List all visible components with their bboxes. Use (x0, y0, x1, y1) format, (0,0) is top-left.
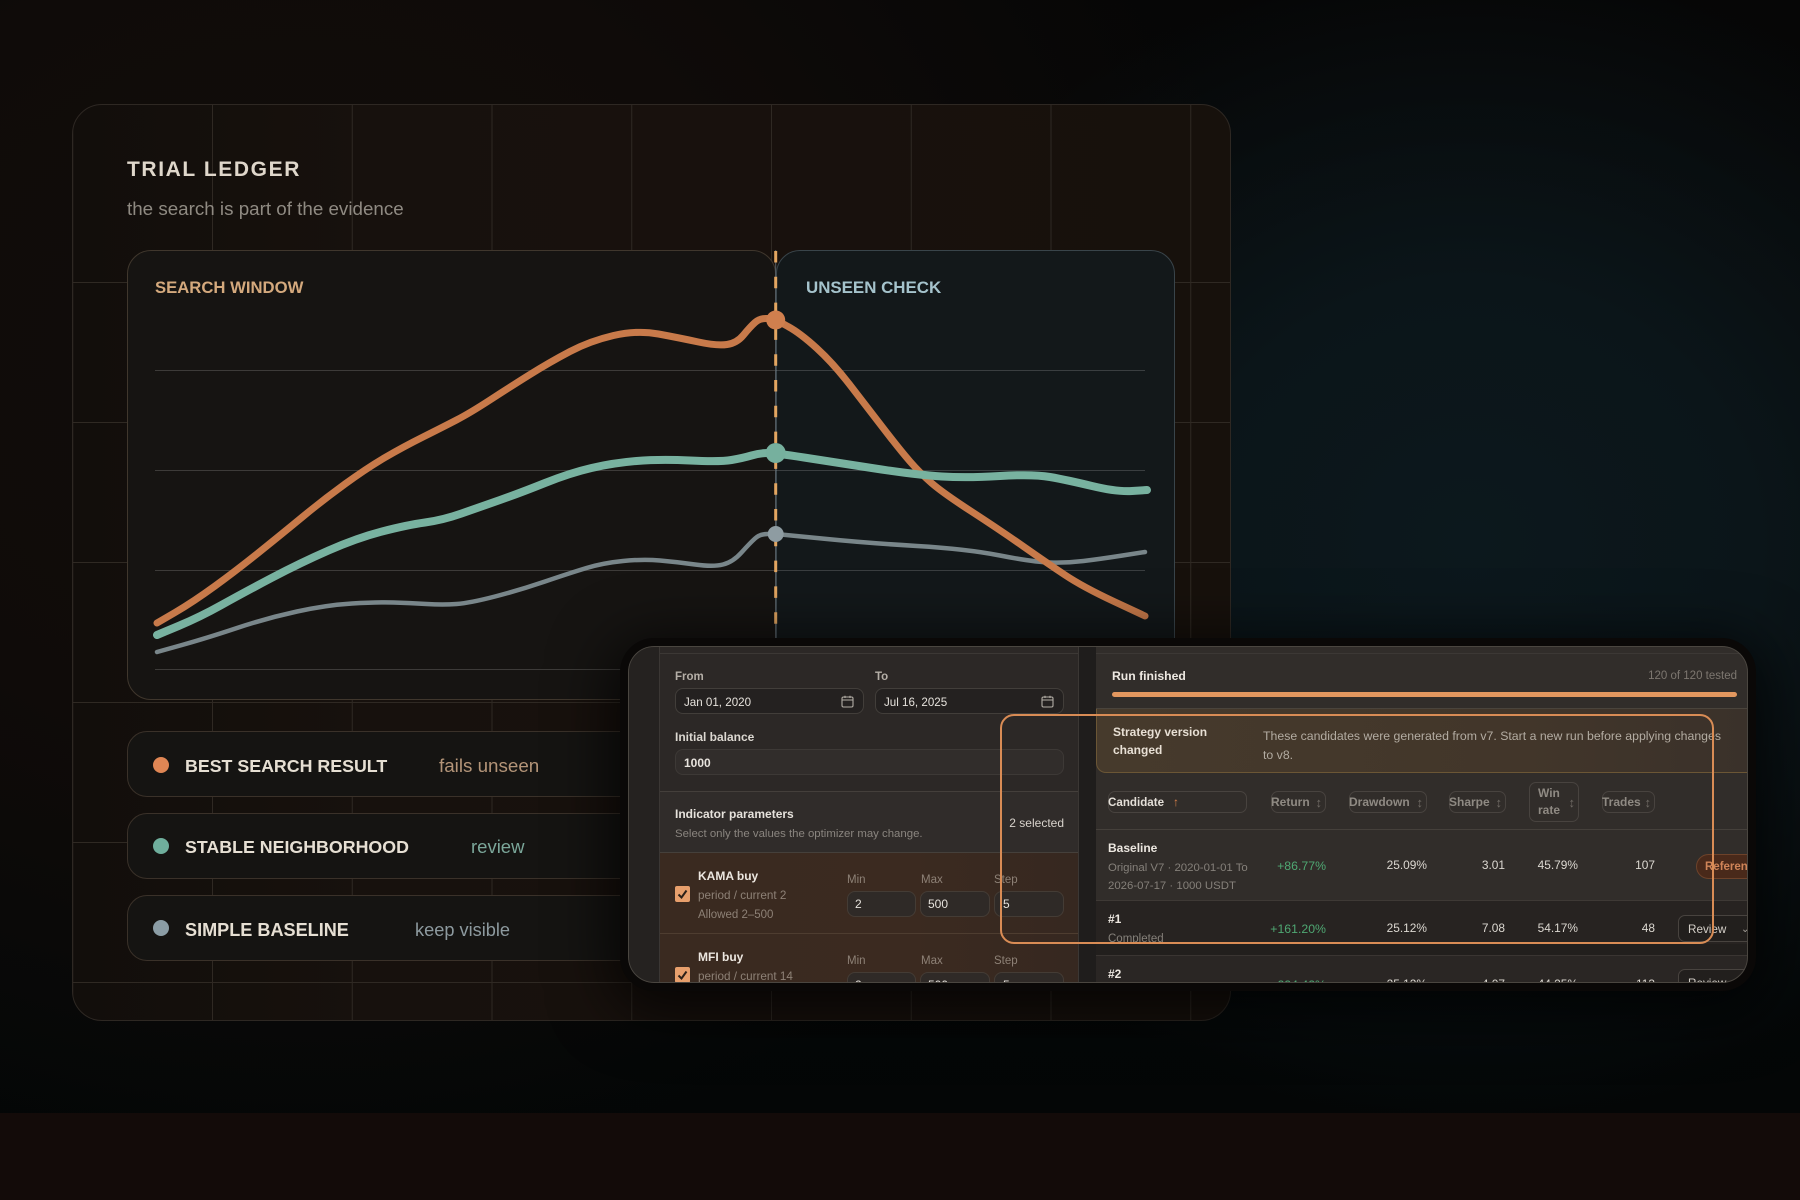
alert body (1263, 728, 1721, 762)
input (675, 749, 1064, 775)
legend: simple baseline (127, 895, 1174, 961)
table header (1096, 773, 1748, 830)
dot (153, 920, 169, 936)
label: From (675, 671, 704, 683)
marker: best search (766, 310, 785, 330)
button: review (1678, 969, 1778, 996)
section: indicator parameters (660, 792, 1078, 853)
series: simple baseline (157, 534, 1145, 652)
field: initial balance (675, 730, 1064, 775)
step label: Step (994, 955, 1018, 967)
return: +86.77% (1277, 859, 1326, 873)
row: baseline (1096, 830, 1748, 901)
column: trades: ↕ (1644, 795, 1651, 810)
label: To (875, 671, 888, 683)
status: keep visible (415, 920, 510, 940)
dot (153, 757, 169, 773)
alert body: These candidates were generated from v7. Start a new run before applying changes (1263, 728, 1721, 742)
legend: stable neighborhood (127, 813, 1174, 879)
panel: settings column (659, 646, 1079, 983)
marker: baseline (768, 526, 784, 542)
max input (920, 972, 990, 998)
step input (994, 891, 1064, 917)
dot (153, 838, 169, 854)
sharpe: 3.01 (1482, 858, 1505, 872)
current: period / current 2 (698, 889, 786, 902)
description: Original V7 · 2020-01-01 To (1108, 862, 1248, 874)
description: 2026-07-17 · 1000 USDT (1108, 880, 1236, 892)
panel: search window (127, 250, 776, 700)
panel: unseen check (776, 250, 1175, 700)
name: #1 (1108, 912, 1121, 926)
alert: strategy version changed (1096, 709, 1748, 773)
status: Completed (1108, 933, 1164, 945)
checkbox (675, 886, 690, 902)
row: MFI buy (660, 934, 1078, 983)
min input (847, 972, 916, 998)
column: sharpe (1449, 791, 1506, 813)
trades: 107 (1635, 858, 1655, 872)
name: Baseline (1108, 841, 1157, 855)
line chart (153, 250, 1151, 670)
step label: Step (994, 874, 1018, 886)
value: 1000 (684, 756, 711, 770)
min label: Min (847, 955, 866, 967)
column: return (1271, 791, 1326, 813)
label: BEST SEARCH RESULT (185, 756, 387, 776)
max input (920, 891, 990, 917)
column: candidate (1108, 791, 1247, 813)
column: win rate (1529, 782, 1579, 822)
panel: optimizer window screenshot (628, 646, 1748, 983)
clipped strip (1096, 944, 1748, 956)
field: from (675, 671, 864, 714)
row: candidate 1 (1096, 901, 1748, 956)
drawdown: 25.09% (1387, 858, 1427, 872)
button: review (1678, 915, 1778, 942)
bottom band (0, 1113, 1800, 1200)
min label: Min (847, 874, 866, 886)
column: return: Return (1271, 795, 1310, 809)
panel: trial ledger card (72, 104, 1231, 1021)
checkbox (675, 967, 690, 983)
marker: stable (766, 443, 786, 463)
field: to (875, 671, 1064, 714)
step input (994, 972, 1064, 998)
column: sharpe: ↕ (1496, 795, 1502, 810)
badge: reference (1696, 854, 1796, 879)
chart: search window versus unseen check (127, 250, 1175, 700)
column: drawdown (1349, 791, 1427, 813)
step value: 5 (1003, 897, 1010, 911)
value: Jan 01, 2020 (684, 696, 751, 709)
return: +161.20% (1270, 922, 1326, 936)
icon: calendar (1041, 696, 1054, 708)
input (675, 688, 864, 714)
max value: 500 (928, 897, 948, 911)
count: 2 selected (1009, 816, 1064, 830)
icon: calendar (841, 696, 854, 708)
column: win rate: rate (1538, 803, 1560, 817)
max label: Max (921, 955, 943, 967)
max label: Max (921, 874, 943, 886)
input (875, 688, 1064, 714)
sharpe: 7.08 (1482, 921, 1505, 935)
subtitle: the search is part of the evidence (127, 198, 404, 218)
status: run finished (1096, 653, 1748, 709)
name: #2 (1108, 967, 1121, 981)
value: Jul 16, 2025 (884, 696, 947, 709)
alert body: to v8. (1263, 748, 1293, 762)
counter: 120 of 120 tested (1648, 670, 1737, 682)
name: MFI buy (698, 950, 743, 964)
column: trades (1602, 791, 1655, 813)
label: SIMPLE BASELINE (185, 920, 349, 940)
hint: Select only the values the optimizer may change. (675, 828, 923, 840)
title: TRIAL LEDGER (127, 158, 301, 181)
status: fails unseen (439, 755, 539, 776)
heading: Indicator parameters (675, 807, 794, 821)
label: search window: SEARCH WINDOW (155, 278, 303, 296)
label: STABLE NEIGHBORHOOD (185, 837, 409, 857)
divider: split line (774, 251, 777, 699)
series: stable neighborhood (157, 453, 1147, 635)
label: Initial balance (675, 730, 754, 744)
trades: 48 (1642, 921, 1655, 935)
min input (847, 891, 916, 917)
column: sharpe: Sharpe (1449, 795, 1490, 809)
row: candidate 2 (1096, 956, 1748, 983)
column: win rate: ↕ (1568, 795, 1575, 810)
win rate: 54.17% (1538, 921, 1578, 935)
series: best search result (157, 318, 1145, 623)
callout: orange highlight frame (1000, 714, 1714, 944)
heading: Run finished (1112, 669, 1186, 683)
column: return: ↕ (1316, 795, 1322, 810)
current: period / current 14 (698, 970, 793, 983)
description (1108, 862, 1248, 892)
column: candidate: ↑ (1173, 795, 1179, 809)
status: review (471, 836, 524, 857)
column: candidate: Candidate (1108, 796, 1164, 809)
progress bar (1112, 692, 1737, 697)
min value: 2 (855, 897, 862, 911)
allowed: Allowed 2–500 (698, 909, 773, 921)
column: drawdown: Drawdown (1349, 795, 1410, 809)
panel: gap column (1079, 646, 1096, 983)
legend: best search result (127, 731, 1174, 797)
win rate: 45.79% (1538, 858, 1578, 872)
label: unseen check: UNSEEN CHECK (806, 278, 941, 296)
alert title: Strategy version changed (1113, 725, 1207, 757)
name: KAMA buy (698, 869, 758, 883)
column: trades: Trades (1602, 795, 1641, 809)
button: review: Review (1688, 923, 1726, 936)
drawdown: 25.12% (1387, 921, 1427, 935)
column: drawdown: ↕ (1416, 795, 1423, 810)
column: win rate: Win (1538, 786, 1560, 800)
panel: results column (1096, 646, 1748, 983)
row: KAMA buy (660, 853, 1078, 934)
